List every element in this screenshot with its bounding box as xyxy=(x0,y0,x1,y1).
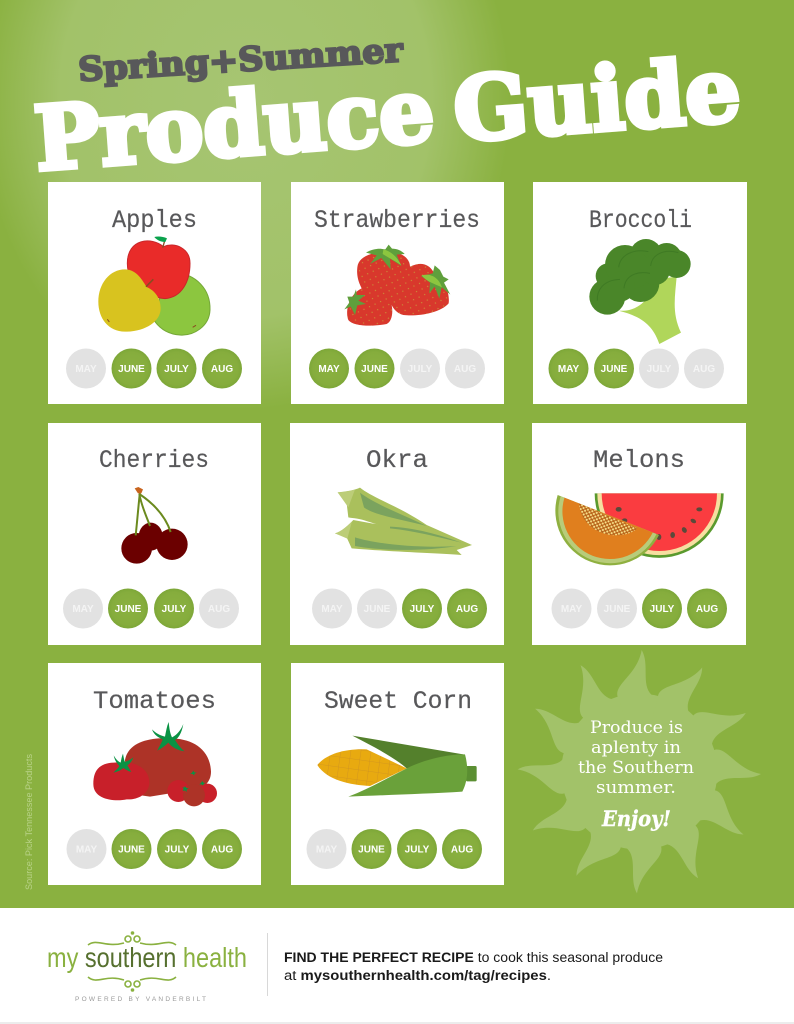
heading: okra: Okra xyxy=(366,446,428,475)
icon: strawberries xyxy=(344,245,450,326)
month badges: strawberries: MAY xyxy=(318,364,340,375)
month badges: tomatoes xyxy=(66,829,242,869)
callout text xyxy=(578,718,694,831)
heading: sweet corn: Sweet Corn xyxy=(324,687,472,716)
icon: sun shape xyxy=(518,650,761,893)
logo wordmark: my southern health xyxy=(47,942,247,973)
month badges: strawberries: AUG xyxy=(454,364,476,375)
month badges: broccoli xyxy=(548,348,724,388)
subtitle: Spring+Summer: Spring+Summer xyxy=(77,30,405,89)
month badges: okra: JULY xyxy=(410,604,435,615)
month badges: melons: JULY xyxy=(650,604,675,615)
month badges: melons xyxy=(552,588,727,628)
callout text: Produce is xyxy=(590,718,683,737)
month badges: okra: AUG xyxy=(456,604,478,615)
icon: cherries xyxy=(121,487,188,564)
panel: apples xyxy=(48,182,261,404)
heading: broccoli: Broccoli xyxy=(589,206,692,235)
month badges: melons: MAY xyxy=(561,604,582,615)
month badges: broccoli: AUG xyxy=(693,364,715,375)
heading: cherries: Cherries xyxy=(99,446,209,475)
month badges: cherries: JULY xyxy=(162,604,187,615)
month badges: sweet corn: JULY xyxy=(405,844,430,856)
month badges: melons: JUNE xyxy=(604,604,631,615)
callout text: the Southern xyxy=(578,758,694,777)
callout: sun xyxy=(518,650,761,893)
month badges: cherries: AUG xyxy=(208,604,230,615)
month badges: broccoli: MAY xyxy=(558,364,579,375)
icon: tomatoes xyxy=(93,722,217,806)
month badges: tomatoes: JUNE xyxy=(118,844,145,856)
heading: Guide: Guide xyxy=(450,37,744,162)
footer call to action xyxy=(284,950,663,983)
month badges: sweet corn xyxy=(306,829,482,869)
month badges: sweet corn: MAY xyxy=(316,844,337,856)
month badges: sweet corn: AUG xyxy=(451,844,473,856)
month badges: strawberries: JUNE xyxy=(361,364,388,375)
panel: melons xyxy=(532,423,746,645)
month badges: okra: MAY xyxy=(321,604,343,615)
month badges: apples: JUNE xyxy=(118,364,145,375)
month badges: cherries xyxy=(63,588,239,628)
heading: strawberries: Strawberries xyxy=(314,206,480,235)
footer xyxy=(0,908,794,1024)
icon: melons xyxy=(555,493,724,565)
month badges: sweet corn: JUNE xyxy=(358,844,385,856)
heading: apples: Apples xyxy=(112,206,197,235)
callout text: summer. xyxy=(596,778,676,797)
month badges: apples: MAY xyxy=(75,364,97,375)
month badges: tomatoes: AUG xyxy=(211,844,233,856)
panel: okra xyxy=(290,423,504,645)
month badges: melons: AUG xyxy=(696,604,718,615)
heading: melons: Melons xyxy=(593,446,685,475)
month badges: okra: JUNE xyxy=(364,604,391,615)
icon: sweet corn xyxy=(317,736,477,797)
heading: tomatoes: Tomatoes xyxy=(93,687,216,716)
month badges: strawberries xyxy=(309,348,485,388)
month badges: cherries: JUNE xyxy=(115,604,142,615)
month badges: strawberries: JULY xyxy=(408,364,433,375)
month badges: cherries: MAY xyxy=(72,604,94,615)
heading: Produce: Produce xyxy=(31,58,437,191)
month badges: broccoli: JUNE xyxy=(601,364,628,375)
icon: okra xyxy=(335,488,472,555)
callout text: Enjoy! xyxy=(601,806,671,831)
month badges: broccoli: JULY xyxy=(647,364,672,375)
month badges: tomatoes: MAY xyxy=(76,844,97,856)
icon: broccoli xyxy=(589,239,691,344)
panel: tomatoes xyxy=(48,663,261,885)
footer call to action: at mysouthernhealth.com/tag/recipes . xyxy=(284,968,551,983)
icon: apples xyxy=(98,237,210,335)
logo: my southern health xyxy=(47,932,247,1003)
panel: cherries xyxy=(48,423,261,645)
title xyxy=(31,30,744,191)
panel: strawberries xyxy=(291,182,504,404)
month badges: apples: JULY xyxy=(164,364,189,375)
month badges: apples: AUG xyxy=(211,364,233,375)
logo tagline: POWERED BY VANDERBILT xyxy=(75,996,206,1003)
month badges: okra xyxy=(312,588,487,628)
source note: Source: Pick Tennessee Products xyxy=(24,754,35,890)
panel: broccoli xyxy=(533,182,747,404)
footer call to action: FIND THE PERFECT RECIPE to cook this seasonal produce xyxy=(284,950,663,965)
callout text: aplenty in xyxy=(591,738,681,757)
month badges: tomatoes: JULY xyxy=(165,844,190,856)
panel: sweet corn xyxy=(291,663,504,885)
logo ornaments xyxy=(88,932,176,991)
month badges: apples xyxy=(66,348,242,388)
